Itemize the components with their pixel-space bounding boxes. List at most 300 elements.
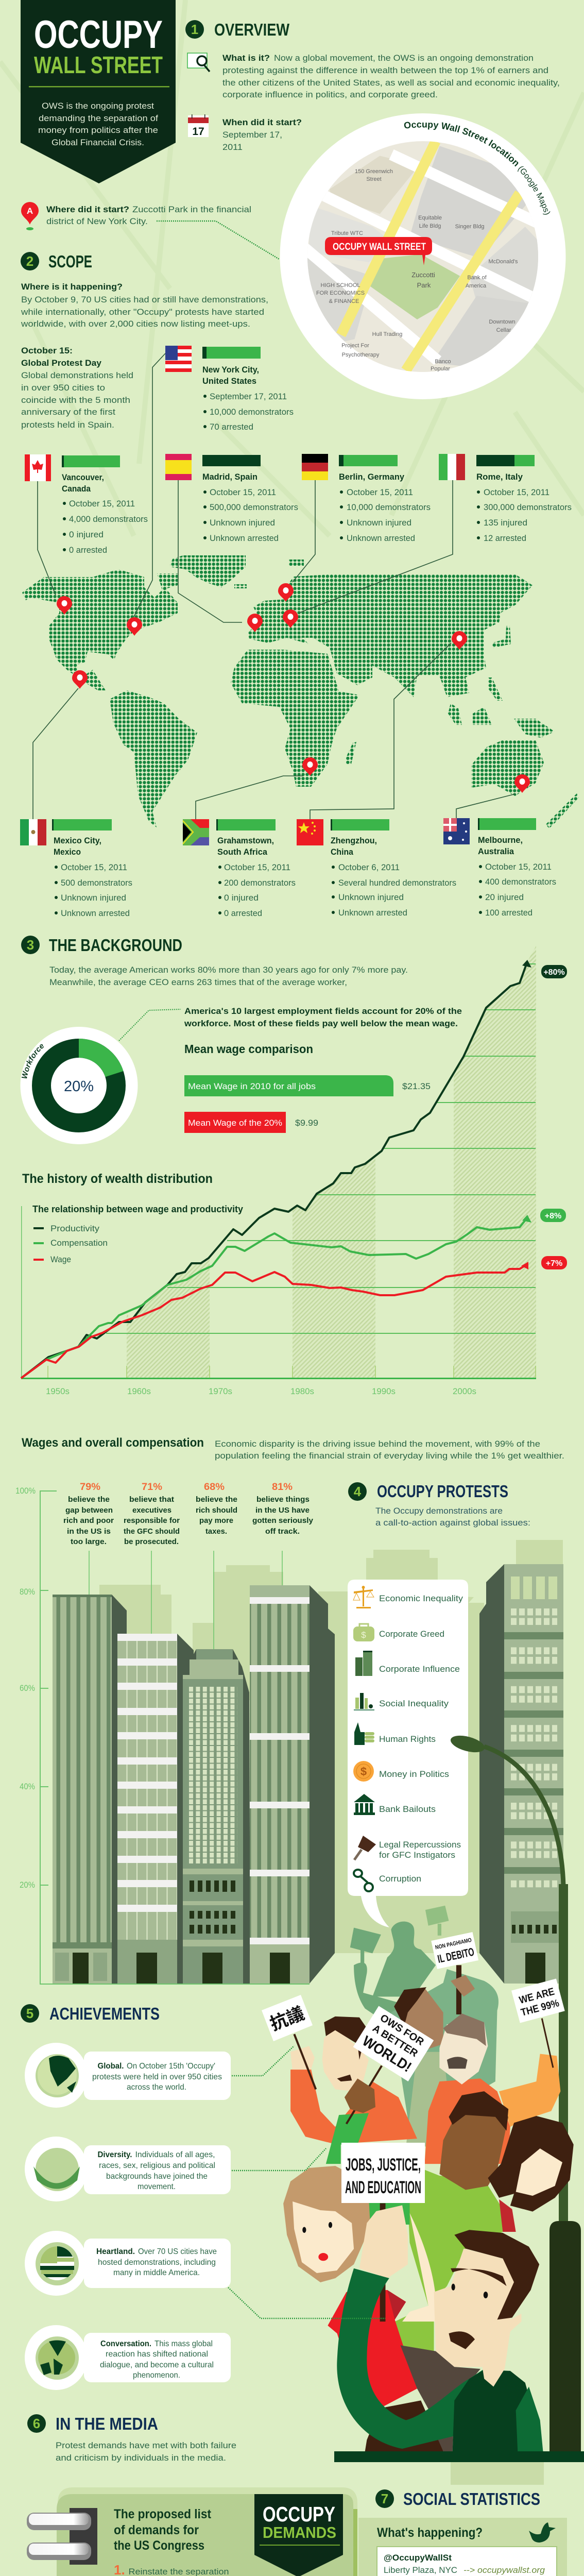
poll: 68%: rich should: [196, 1506, 237, 1515]
notebook: occupy demands: [27, 2487, 357, 2576]
achievement: heartland: Heartland.: [96, 2247, 135, 2256]
location: berlin: Unknown arrested: [347, 533, 415, 543]
map labels: Tribute WTC: [331, 230, 363, 236]
protester figures back row: [290, 1965, 560, 2164]
bar: mean wage all jobs: [184, 1075, 431, 1096]
poll: 79%: believe the: [68, 1495, 110, 1504]
location: new york: [165, 346, 294, 432]
poll: 68%: pay more: [199, 1516, 233, 1525]
poll: 81%: gotten seriously: [252, 1516, 314, 1525]
chart axis: percent: 20%: [20, 1880, 35, 1890]
icon: bars: [354, 1693, 374, 1710]
pin A: A: [27, 206, 33, 216]
location: vancouver: 0 arrested: [69, 545, 107, 555]
global protest day text: [21, 346, 133, 430]
section 3 heading: the background: [21, 936, 182, 955]
location: madrid: Unknown injured: [210, 518, 275, 528]
map labels: Equitable: [418, 215, 442, 221]
pin A: [21, 202, 39, 230]
location: new york: United States: [202, 376, 256, 386]
scope text: By October 9, 70 US cities had or still have demonstrations,: [21, 295, 268, 304]
location: berlin: [302, 454, 431, 543]
speech bubble: issues list: Social Inequality: [379, 1699, 449, 1708]
map labels: & FINANCE: [329, 298, 359, 304]
location: new york: New York City,: [202, 365, 259, 375]
section 7 heading: social statistics: 7: [381, 2491, 388, 2506]
achievement: global: protests were held in over 950 cities: [92, 2073, 222, 2081]
line chart: wage and productivity: [21, 946, 567, 1396]
twitter profile box: --> occupywallst.org: [463, 2565, 545, 2575]
map labels: Cellar: [496, 327, 511, 333]
speech bubble: issues list: Corruption: [379, 1874, 421, 1884]
sign: non pagiamo il debito: IL DEBITO: [436, 1945, 475, 1965]
when did it start text: 2011: [222, 142, 243, 152]
map labels: Bank of: [467, 275, 487, 281]
poll: 81%: off track.: [265, 1527, 300, 1536]
icon: coin: [353, 1761, 374, 1782]
achievement: diversity: Diversity.: [98, 2150, 132, 2159]
achievement: diversity: backgrounds have joined the: [106, 2172, 208, 2181]
curved map title: Occupy Wall Street location (Google Maps): [404, 122, 550, 215]
map labels: Zuccotti: [411, 271, 435, 279]
building 2: [117, 1634, 194, 1984]
chart axis: percent: 100%: [15, 1486, 36, 1496]
icon: corporate towers: [355, 1651, 372, 1676]
poll: 79%: gap between: [65, 1506, 113, 1515]
decade labels: 2000s: [453, 1386, 476, 1396]
what is it text: Now a global movement, the OWS is an ongoing demonstration: [274, 53, 534, 63]
speech bubble: issues list: Bank Bailouts: [379, 1804, 436, 1814]
location: zhengzhou: Several hundred demonstrators: [338, 878, 456, 888]
dotted connector: [157, 221, 279, 259]
location: rome: 12 arrested: [484, 533, 526, 543]
section 3 heading: the background: THE BACKGROUND: [49, 936, 182, 955]
achievement: conversation: [25, 2325, 231, 2390]
sign: protest in chinese: 抗議: [267, 2004, 307, 2035]
section 1 heading: overview: OVERVIEW: [214, 20, 290, 39]
flag: Australia: [443, 818, 470, 844]
spiral rings: [27, 2513, 91, 2576]
icon: coin: $: [360, 1765, 367, 1778]
speech bubble: issues list: Corporate Greed: [379, 1629, 444, 1639]
protests intro text: a call-to-action against global issues:: [375, 1518, 530, 1528]
location: vancouver: 0 injured: [69, 530, 104, 539]
poll: 68%: believe the: [196, 1495, 237, 1504]
section 1 heading: overview: [185, 20, 290, 39]
location: vancouver: Vancouver,: [62, 472, 104, 482]
map labels: FOR ECONOMICS: [316, 290, 365, 296]
chart axis: percent: 40%: [20, 1782, 35, 1791]
poll: 71%: the GFC should: [124, 1527, 180, 1536]
location: grahamstown: [183, 819, 296, 918]
global protest day text: protests held in Spain.: [21, 420, 114, 430]
location: zhengzhou: October 6, 2011: [338, 862, 400, 872]
flag: Mexico: [20, 819, 46, 845]
icon: conversation globe: [38, 2340, 75, 2375]
heading: history of wealth distribution: The history of wealth distribution: [22, 1172, 213, 1186]
decade labels: 1980s: [290, 1386, 314, 1396]
location: madrid: October 15, 2011: [210, 487, 276, 497]
sign: ows for a better world: OWS FOR: [378, 2012, 426, 2048]
location: madrid: Unknown arrested: [210, 533, 279, 543]
heading: what's happening: What's happening?: [377, 2526, 483, 2540]
location: madrid: [165, 454, 298, 543]
banner description: OWS is the ongoing protest: [42, 101, 154, 111]
where did it start text: Where did it start?: [46, 205, 129, 214]
icon: money bag: $: [361, 1630, 366, 1640]
location: mexico city: Mexico: [54, 847, 81, 857]
icon: calendar: 17: [192, 126, 204, 138]
location: berlin: Berlin, Germany: [339, 472, 405, 482]
chart legend: Wage: [50, 1255, 71, 1264]
poll: 79%: in the US is: [67, 1527, 111, 1536]
location: berlin: 10,000 demonstrators: [347, 502, 431, 512]
banner description: Global Financial Crisis.: [51, 138, 144, 147]
location: melbourne: [443, 818, 556, 918]
icon: gavel: [354, 1836, 376, 1860]
location: vancouver: October 15, 2011: [69, 499, 135, 509]
protests intro text: The Occupy demonstrations are: [375, 1506, 503, 1516]
location: berlin: October 15, 2011: [347, 487, 413, 497]
location: vancouver: [25, 454, 148, 555]
building right: [479, 1564, 563, 1984]
dotted world map: [22, 555, 579, 828]
scope text: worldwide, with over 2,000 cities now listing meet-ups.: [21, 319, 250, 329]
poll: 71%: 71%: [142, 1482, 162, 1493]
icon: calendar: [188, 114, 209, 138]
chart legend: Compensation: [50, 1238, 108, 1248]
achievement: heartland: [25, 2231, 231, 2296]
chart axis: percent: [15, 1486, 310, 1984]
map labels: Banco: [435, 359, 451, 365]
sign: we are the 99%: [511, 1978, 565, 2023]
what is it text: corporate influence in politics, and corporate greed.: [222, 90, 438, 99]
banner: occupy demands: [254, 2494, 343, 2576]
line: productivity: [21, 964, 526, 1378]
scope text: Where is it happening?: [21, 282, 123, 292]
global protest day text: anniversary of the first: [21, 407, 115, 417]
where did it start text: district of New York City.: [46, 216, 148, 226]
building 3: [177, 1649, 250, 1984]
pill: +80%: +80%: [543, 968, 565, 977]
spiral binding strips: [70, 2508, 97, 2576]
icon: people ring: [33, 2166, 80, 2189]
achievement: diversity: [25, 2137, 231, 2201]
protests intro text: [375, 1506, 530, 1528]
scope text: [21, 282, 268, 329]
pill: +8%: [540, 1209, 566, 1222]
location: grahamstown: Grahamstown,: [217, 836, 274, 845]
twitter profile box: @OccupyWallSt: [384, 2553, 452, 2563]
location: zhengzhou: [297, 819, 456, 918]
location map: [280, 113, 565, 399]
achievement: conversation: Conversation.: [100, 2340, 151, 2348]
title: OCCUPY: [34, 13, 163, 57]
location: grahamstown: 0 injured: [224, 893, 259, 903]
icon: handcuffs: [354, 1870, 373, 1891]
flag: Italy: [439, 454, 465, 480]
section 4 heading: occupy protests: OCCUPY PROTESTS: [377, 1482, 508, 1501]
flag: Canada: [25, 454, 51, 481]
icon: american flag globe: [40, 2246, 74, 2280]
global protest day text: Global Protest Day: [21, 358, 102, 368]
notebook title: [114, 2507, 212, 2553]
when did it start text: September 17,: [222, 130, 282, 140]
location: zhengzhou: Unknown injured: [338, 892, 404, 902]
background silhouettes: [350, 1906, 499, 2146]
map labels: Singer Bldg: [455, 224, 484, 230]
location: mexico city: 500 demonstrators: [61, 878, 132, 888]
background text: [49, 965, 408, 987]
economic disparity text: population feeling the financial strain of everyday living while the 1% get wealthier.: [215, 1451, 564, 1461]
chart axis: percent: 60%: [20, 1683, 35, 1693]
achievement: diversity: races, sex, religious and political: [99, 2161, 215, 2170]
donut chart: workforce: 20%: [64, 1078, 94, 1095]
speech bubble: issues list: Legal Repercussions: [379, 1840, 461, 1850]
chart legend: The relationship between wage and productivity: [32, 1204, 243, 1214]
sign: we are the 99%: WE ARE: [518, 1986, 556, 2006]
banner description: demanding the separation of: [39, 113, 158, 123]
location: new york: September 17, 2011: [210, 392, 287, 401]
callout: occupy wall street: [325, 237, 432, 265]
pill: +8%: +8%: [545, 1212, 561, 1221]
flag: South Africa: [183, 819, 209, 845]
location: mexico city: October 15, 2011: [61, 862, 127, 872]
poll: 81%: 81%: [272, 1482, 293, 1493]
when did it start text: [222, 117, 302, 152]
crowd plinth: [334, 2451, 584, 2462]
what is it text: the other citizens of the United States, as well as social and economic inequality,: [222, 78, 560, 88]
location: vancouver: Canada: [62, 484, 91, 494]
speech bubble: issues list: Money in Politics: [379, 1769, 449, 1779]
location: melbourne: 20 injured: [485, 892, 524, 902]
map labels: HIGH SCHOOL: [320, 282, 360, 289]
sign: non pagiamo il debito: [431, 1932, 478, 1969]
flag: Germany: [302, 454, 328, 480]
location: mexico city: Unknown arrested: [61, 908, 130, 918]
what is it text: What is it?: [222, 53, 270, 63]
map labels: Downtown: [489, 319, 516, 325]
where did it start text: [46, 205, 251, 226]
map labels: Life Bldg: [419, 223, 441, 229]
skyline background: [99, 1540, 563, 1953]
location: zhengzhou: Unknown arrested: [338, 908, 407, 918]
donut chart: workforce: Workforce: [22, 1044, 44, 1079]
sign: ows for a better world: [353, 2006, 434, 2081]
media intro text: [56, 2441, 236, 2463]
background text: Today, the average American works 80% more than 30 years ago for only 7% more pay.: [49, 965, 408, 975]
map labels: Street: [366, 176, 382, 182]
speech bubble: issues list: Corporate Influence: [379, 1664, 460, 1674]
location: mexico city: Mexico City,: [54, 836, 101, 845]
economic disparity text: Economic disparity is the driving issue behind the movement, with 99% of the: [215, 1439, 540, 1449]
section 2 heading: scope: 2: [26, 253, 33, 269]
economic disparity text: [215, 1439, 564, 1461]
location: madrid: Madrid, Spain: [202, 472, 257, 482]
location: mexico city: [20, 819, 132, 918]
poll: 79%: 79%: [80, 1482, 100, 1493]
location: berlin: Unknown injured: [347, 518, 411, 528]
location: melbourne: Melbourne,: [478, 835, 523, 845]
bar: mean wage of the 20%: $9.99: [295, 1118, 318, 1128]
bar: mean wage all jobs: $21.35: [402, 1081, 431, 1091]
achievement: conversation: dialogue, and become a cultural: [100, 2361, 214, 2369]
location: grahamstown: South Africa: [217, 847, 268, 857]
when did it start text: When did it start?: [222, 117, 302, 127]
icon: magnifier on book: [187, 53, 210, 72]
poll: 81%: in the US have: [255, 1506, 310, 1515]
media intro text: Protest demands have met with both failure: [56, 2441, 236, 2450]
subtitle: WALL STREET: [34, 52, 163, 78]
speech bubble: issues list: Economic Inequality: [379, 1594, 463, 1603]
location: grahamstown: 0 arrested: [224, 908, 262, 918]
global protest day text: Global demonstrations held: [21, 370, 133, 380]
achievement: global: [25, 2043, 231, 2108]
icon: bank: [354, 1794, 375, 1815]
poll: 68%: [196, 1482, 237, 1536]
bar: mean wage all jobs: Mean Wage in 2010 for all jobs: [188, 1081, 316, 1091]
map labels: Psychotherapy: [342, 352, 380, 358]
decade labels: 1960s: [127, 1386, 151, 1396]
icon: money bag: [353, 1624, 374, 1641]
location: rome: [439, 454, 572, 543]
notebook title: The proposed list: [114, 2507, 212, 2521]
sign: protest in chinese: [262, 1995, 313, 2041]
dotted connector: [119, 1009, 181, 1041]
wages and compensation heading: Wages and overall compensation: [22, 1436, 204, 1450]
chart legend: Productivity: [50, 1224, 100, 1233]
decade labels: 1970s: [209, 1386, 232, 1396]
section 4 heading: occupy protests: [348, 1482, 508, 1501]
chart legend: [32, 1204, 243, 1264]
notebook title: the US Congress: [114, 2538, 204, 2553]
achievement: diversity: movement.: [138, 2182, 176, 2191]
map labels: Hull Trading: [372, 331, 402, 337]
speech bubble: issues list: [348, 1580, 468, 1927]
speech bubble: issues list: Human Rights: [379, 1734, 436, 1744]
pill: +7%: +7%: [546, 1259, 562, 1268]
sign: jobs, justice and education: [341, 2143, 425, 2203]
twitter profile box: [377, 2547, 557, 2576]
banner description: money from politics after the: [38, 125, 158, 135]
where did it start text: Zuccotti Park in the financial: [132, 205, 251, 214]
achievement: diversity: Individuals of all ages,: [135, 2150, 215, 2159]
section 2 heading: scope: SCOPE: [48, 252, 92, 271]
achievement: global: across the world.: [127, 2083, 186, 2092]
sign: non pagiamo il debito: NON PAGHIAMO: [435, 1937, 472, 1951]
flag: USA: [165, 346, 192, 372]
panel: social statistics: [358, 2518, 567, 2576]
location: rome: 300,000 demonstrators: [484, 502, 572, 512]
sign: we are the 99%: THE 99%: [520, 1997, 560, 2019]
achievement: conversation: phenomenon.: [133, 2371, 180, 2380]
location: grahamstown: October 15, 2011: [224, 862, 290, 872]
media intro text: and criticism by individuals in the media.: [56, 2453, 226, 2463]
location: rome: Rome, Italy: [476, 472, 523, 482]
icon: thumbs up: [354, 1722, 374, 1745]
poll: 79%: [63, 1482, 114, 1546]
demand 1: [114, 2562, 334, 2576]
banner: occupy demands: DEMANDS: [263, 2523, 336, 2541]
section 1 heading: overview: 1: [191, 22, 198, 37]
poll: 68%: 68%: [204, 1482, 225, 1493]
sign: jobs, justice and education: JOBS, JUSTICE,: [346, 2155, 421, 2175]
achievement: conversation: reaction has shifted national: [106, 2350, 208, 2359]
poll: 71%: be prosecuted.: [124, 1537, 179, 1546]
background text: Meanwhile, the average CEO earns 263 times that of the average worker,: [49, 977, 347, 987]
heading: mean wage comparison: Mean wage comparison: [184, 1042, 313, 1056]
section 7 heading: social statistics: SOCIAL STATISTICS: [403, 2489, 540, 2509]
global protest day text: October 15:: [21, 346, 73, 355]
pill: +80%: [541, 965, 567, 978]
speech bubble: issues list: for GFC Instigators: [379, 1850, 455, 1860]
flag: China: [297, 819, 323, 845]
building 4: [250, 1585, 335, 1984]
location: new york: 10,000 demonstrators: [210, 407, 294, 417]
location: rome: October 15, 2011: [484, 487, 549, 497]
poll: 68%: taxes.: [205, 1527, 227, 1536]
poll: 71%: [124, 1482, 180, 1546]
location: rome: 135 injured: [484, 518, 527, 528]
faint street map background: [0, 0, 584, 536]
achievement: heartland: many in middle America.: [113, 2268, 200, 2277]
poll: 81%: [252, 1482, 314, 1536]
map labels: America: [466, 283, 487, 289]
flag connectors: [33, 353, 516, 819]
section 5 heading: achievements: [21, 2004, 160, 2023]
sign: ows for a better world: A BETTER: [370, 2023, 420, 2060]
section 5 heading: achievements: ACHIEVEMENTS: [49, 2004, 160, 2023]
employment fields text: America's 10 largest employment fields account for 20% of the: [184, 1006, 462, 1016]
achievement: heartland: hosted demonstrations, including: [98, 2258, 216, 2267]
what is it text: [222, 53, 560, 99]
banner: occupy demands: OCCUPY: [263, 2502, 335, 2526]
banner description: [38, 101, 158, 147]
global protest day text: coincide with the 5 month: [21, 395, 130, 405]
notebook title: of demands for: [114, 2523, 199, 2537]
poll: 79%: too large.: [71, 1537, 107, 1546]
plinth pedestal: [451, 2462, 544, 2485]
sign: jobs, justice and education: AND EDUCATION: [345, 2178, 421, 2197]
line: compensation: [21, 1219, 526, 1378]
location: zhengzhou: Zhengzhou,: [331, 836, 377, 845]
icon: twitter bird: [529, 2522, 556, 2543]
donut chart: workforce: [21, 1027, 138, 1144]
map labels: Project For: [341, 343, 369, 349]
poll: 71%: responsible for: [124, 1516, 180, 1525]
front protesters: [283, 2091, 574, 2451]
building 1: [53, 1595, 127, 1984]
poll: 71%: believe that: [129, 1495, 174, 1504]
location: mexico city: Unknown injured: [61, 893, 126, 903]
map labels: 150 Greenwich: [355, 168, 393, 175]
location: new york: 70 arrested: [210, 422, 253, 432]
section 3 heading: the background: 3: [27, 937, 34, 953]
pill: +7%: [541, 1256, 567, 1269]
twitter profile box: Liberty Plaza, NYC: [384, 2565, 457, 2575]
dotted connectors: [228, 2046, 385, 2318]
section 4 heading: occupy protests: 4: [354, 1484, 362, 1499]
map labels: [316, 168, 518, 372]
location: melbourne: 400 demonstrators: [485, 877, 556, 887]
chart axis: percent: 80%: [20, 1587, 35, 1597]
section 5 heading: achievements: 5: [26, 2006, 33, 2021]
protest crowd illustration: [262, 1906, 584, 2485]
callout: occupy wall street: OCCUPY WALL STREET: [333, 242, 426, 252]
scope text: while internationally, other "Occupy" protests have started: [21, 307, 264, 317]
bar: mean wage of the 20%: Mean Wage of the 20%: [188, 1118, 282, 1128]
map labels: McDonald's: [488, 259, 518, 265]
